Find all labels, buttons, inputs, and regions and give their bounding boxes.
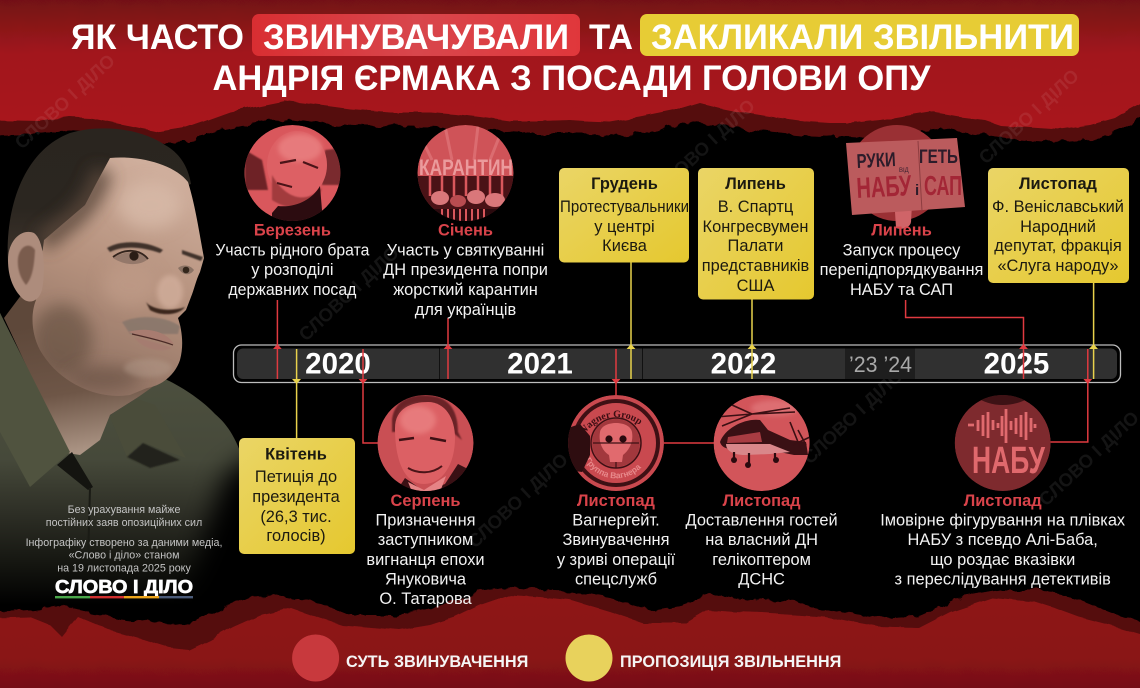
- photo: NABU shirt: [955, 390, 1051, 491]
- month: Січень: [438, 222, 493, 240]
- description: Запуск процесу: [843, 242, 961, 260]
- photo: protest sign: РУКИ: [856, 149, 896, 173]
- card: April 2020: [239, 438, 355, 554]
- connector: April 2020: [296, 349, 298, 438]
- legend: accusation: СУТЬ ЗВИНУВАЧЕННЯ: [346, 653, 528, 671]
- watermarks: СЛОВО І ДІЛО: [798, 365, 907, 468]
- description: Звинувачення: [563, 531, 669, 549]
- event: November 2021 helicopter: [686, 395, 838, 588]
- card: December 2021: Грудень: [591, 175, 658, 193]
- card: July 2022: Липень: [725, 175, 786, 193]
- description: державних посад: [228, 281, 357, 299]
- photo: quarantine candles: КАРАНТИН: [419, 155, 513, 180]
- description: Януковича: [385, 570, 467, 588]
- description: Участь рідного брата: [215, 242, 370, 260]
- description: О. Татарова: [379, 590, 472, 608]
- card: December 2021: [559, 168, 689, 262]
- timeline bar: [234, 345, 1120, 382]
- soft hair fade along the temple: [42, 170, 103, 243]
- card: April 2020: Квітень: [265, 446, 327, 464]
- bottom torn red band: [0, 587, 1140, 688]
- photo: protest sign: ГЕТЬ: [919, 147, 958, 168]
- card: July 2022: представників: [702, 257, 809, 275]
- card: April 2020: Петиція до: [255, 468, 337, 486]
- watermarks: СЛОВО І ДІЛО: [1034, 407, 1140, 510]
- timeline bar: 2022: [711, 348, 776, 380]
- title: [71, 14, 1079, 98]
- description: [215, 242, 370, 299]
- connector: November 2021: [615, 349, 617, 395]
- photo: Wagner Group patch: C Wagner Group: [582, 410, 642, 431]
- month: Березень: [254, 222, 331, 240]
- photo: protest sign: НАБУ: [856, 170, 913, 205]
- description: НАБУ з псевдо Алі-Баба,: [908, 531, 1098, 549]
- description: жорсткий карантин: [393, 281, 538, 299]
- legend: accusation: [292, 634, 528, 682]
- description: спецслужб: [575, 570, 657, 588]
- description: вигнанця епохи: [366, 551, 485, 569]
- logo: Slovo i Dilo: СЛОВО І ДІЛО: [55, 576, 193, 597]
- card: April 2020: президента: [252, 488, 341, 506]
- description: Вагнергейт.: [572, 512, 660, 530]
- photo: protest sign: [846, 125, 965, 229]
- title line one: [71, 17, 1074, 57]
- photo: man in turtleneck: [244, 125, 342, 222]
- card: November 2025 proposal: Народний: [1020, 218, 1096, 236]
- event: January 2021: [383, 125, 548, 319]
- description: Призначення: [375, 512, 476, 530]
- photo: Wagner Group patch: Группа Вагнера: [586, 457, 642, 478]
- timeline bar: 2025: [984, 348, 1049, 380]
- description: [880, 512, 1126, 588]
- description: Імовірне фігурування на плівках: [880, 512, 1126, 530]
- event: July 2025: [820, 125, 983, 299]
- connector: Wagner to helicopter: [664, 442, 714, 444]
- event: August 2020: [366, 395, 485, 608]
- year labels: 2020: [305, 348, 371, 380]
- watermarks: СЛОВО І ДІЛО: [650, 95, 759, 198]
- description: НАБУ та САП: [850, 281, 953, 299]
- card: December 2021: Протестувальники: [560, 198, 689, 216]
- description: гелікоптером: [712, 551, 811, 569]
- watermarks: [10, 50, 1140, 552]
- title line one: ЗАКЛИКАЛИ ЗВІЛЬНИТИ: [651, 17, 1074, 57]
- photo: Wagner Group patch: [568, 395, 664, 491]
- connector: November 2025 accusation: [1050, 349, 1088, 442]
- legend: dismissal proposal: [566, 634, 841, 682]
- description: у зриві операції: [557, 551, 676, 569]
- arrowheads: [273, 344, 1098, 384]
- card: April 2020: (26,3 тис.: [260, 508, 332, 526]
- yellow highlight: [640, 14, 1079, 56]
- description: у розподілі: [251, 261, 334, 279]
- portrait of Andrii Yermak: [0, 128, 239, 590]
- card: April 2020: голосів): [266, 527, 326, 545]
- photo: helicopter: [714, 395, 810, 491]
- description: для українців: [415, 301, 516, 319]
- card: July 2022: Палати: [728, 237, 783, 255]
- card: December 2021: у центрі: [594, 218, 655, 236]
- card: November 2025 proposal: «Слуга народу»: [997, 257, 1119, 275]
- description: [557, 512, 676, 588]
- connector: July 2022: [751, 299, 753, 379]
- card: July 2022: В. Спартц: [718, 198, 794, 216]
- watermarks: СЛОВО І ДІЛО: [463, 449, 572, 552]
- photo: O. Tatarov: [378, 395, 474, 495]
- month: Листопад: [964, 492, 1042, 510]
- event: November 2021 Wagner: [556, 395, 676, 588]
- note: disclaimer and source: Інфографіку створено за даними медіа,: [26, 537, 222, 549]
- connector: July 2025: [906, 300, 1024, 379]
- month: Липень: [871, 222, 932, 240]
- month: Серпень: [391, 492, 460, 510]
- note: disclaimer and source: постійних заяв опозиційних сил: [46, 517, 202, 529]
- title line one: ТА: [589, 17, 633, 57]
- timeline bar: 2021: [507, 348, 573, 380]
- description: що роздає вказівки: [930, 551, 1075, 569]
- connector: January 2021: [447, 318, 449, 379]
- description: заступником: [378, 531, 473, 549]
- watermarks: СЛОВО І ДІЛО: [10, 50, 119, 153]
- photo: protest sign: і: [915, 182, 919, 199]
- timeline bar: ’23 ’24: [849, 352, 912, 377]
- watermarks: СЛОВО І ДІЛО: [294, 242, 403, 345]
- watermarks: СЛОВО І ДІЛО: [974, 65, 1083, 168]
- card: December 2021: Києва: [602, 237, 648, 255]
- note: disclaimer and source: Без урахування майже: [68, 504, 180, 516]
- card: November 2025 proposal: Ф. Веніславський: [992, 198, 1124, 216]
- legend: dismissal proposal: ПРОПОЗИЦІЯ ЗВІЛЬНЕННЯ: [620, 653, 841, 671]
- event: November 2025: [880, 390, 1126, 588]
- description: ДСНС: [738, 570, 785, 588]
- photo: quarantine candles: [418, 125, 514, 222]
- description: на власний ДН: [705, 531, 818, 549]
- photo: NABU shirt: НАБУ: [972, 440, 1045, 482]
- description: [366, 512, 485, 608]
- card: November 2025 proposal: депутат, фракція: [994, 237, 1122, 255]
- note: disclaimer and source: на 19 листопада 2025 року: [57, 562, 191, 574]
- description: з переслідування детективів: [895, 570, 1111, 588]
- event: March 2020: [215, 125, 370, 299]
- note: disclaimer and source: [26, 504, 222, 574]
- card: July 2022: США: [737, 277, 774, 295]
- title line one: ЗВИНУВАЧУВАЛИ: [263, 17, 569, 57]
- description: [820, 242, 983, 299]
- title line two: АНДРІЯ ЄРМАКА З ПОСАДИ ГОЛОВИ ОПУ: [212, 58, 931, 98]
- note: disclaimer and source: «Слово і діло» станом: [69, 550, 179, 562]
- description: Доставлення гостей: [686, 512, 838, 530]
- photo: protest sign: САП: [924, 170, 962, 201]
- description: ДН президента попри: [383, 261, 548, 279]
- card: July 2022: [698, 168, 814, 300]
- month: Листопад: [577, 492, 656, 510]
- card: November 2025 proposal: Листопад: [1019, 175, 1098, 193]
- description: [383, 242, 548, 319]
- card: July 2022: Конгресвумен: [703, 218, 808, 236]
- title line one: ЯК ЧАСТО: [71, 17, 244, 57]
- connector: August 2020: [363, 349, 378, 443]
- connector: March 2020: [276, 300, 278, 379]
- red highlight: [252, 14, 580, 56]
- card: November 2025 proposal: [988, 168, 1129, 283]
- photo: protest sign: ВІД: [899, 168, 909, 174]
- connectors: [273, 262, 1098, 443]
- description: перепідпорядкування: [820, 261, 983, 279]
- description: [686, 512, 838, 588]
- connector: November 2025 proposal: [1093, 283, 1095, 379]
- connector: December 2021: [630, 262, 632, 379]
- description: Участь у святкуванні: [387, 242, 544, 260]
- month: Листопад: [723, 492, 801, 510]
- top torn red band: [0, 0, 1140, 144]
- legend: [292, 634, 841, 682]
